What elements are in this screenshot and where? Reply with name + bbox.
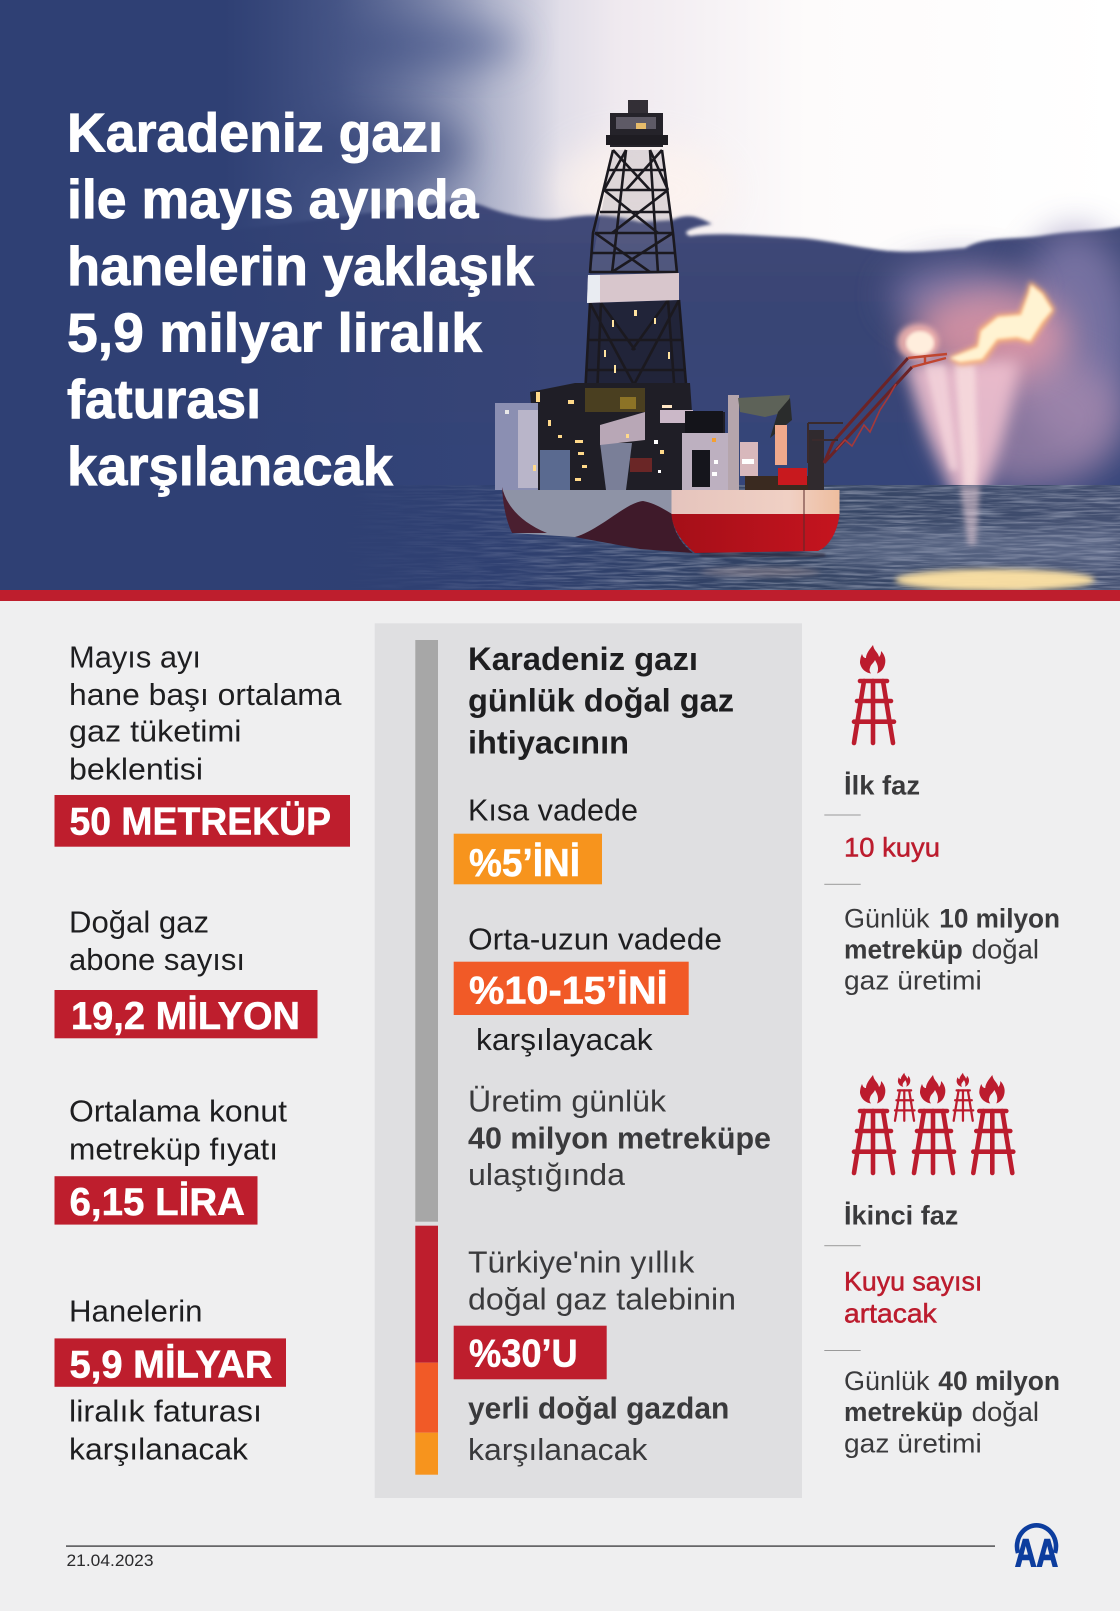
annual demand: Türkiye'nin yıllık (468, 1244, 695, 1279)
mid-long term: Orta-uzun vadede (468, 921, 722, 956)
flare glow and falling veil (897, 281, 1070, 530)
second phase text (824, 1201, 1060, 1458)
panel heading: günlük doğal gaz (468, 683, 734, 719)
panel heading: Karadeniz gazı (468, 641, 698, 677)
panel: center (375, 623, 802, 1498)
left stat: consumption: Mayıs ayı (69, 640, 201, 675)
left stat: consumption: gaz tüketimi (69, 714, 242, 749)
annual demand: yerli doğal gazdan (468, 1390, 729, 1425)
panel heading: ihtiyacının (468, 724, 629, 760)
first phase text: Günlük (844, 903, 930, 933)
first phase text: İlk faz (844, 770, 920, 800)
panel heading (468, 641, 734, 760)
hero photo: drillship at sea (0, 0, 1120, 591)
first phase text (824, 770, 1060, 996)
ship derrick tower (585, 100, 687, 396)
hero red band (0, 590, 1120, 601)
production note: ulaştığında (468, 1157, 626, 1192)
left stat: price: Ortalama konut (69, 1094, 287, 1129)
mid-long term: %10-15’İNİ (469, 969, 668, 1012)
second phase text: metreküp (844, 1397, 963, 1427)
left stat: consumption: hane başı ortalama (69, 677, 342, 712)
left stat: bill: Hanelerin (69, 1293, 202, 1328)
second phase text: doğal (972, 1397, 1039, 1427)
mid-long term (454, 921, 722, 1057)
production note: 40 milyon metreküpe (468, 1120, 771, 1155)
icon: single rig (854, 645, 894, 743)
short term: Kısa vadede (468, 793, 638, 828)
left stat: bill: liralık faturası (69, 1393, 262, 1428)
left stat: bill: 5,9 MİLYAR (70, 1343, 272, 1386)
left stat: subscribers: abone sayısı (69, 942, 245, 977)
title: faturası (67, 368, 261, 430)
left stat: subscribers: 19,2 MİLYON (71, 995, 300, 1038)
left stat: consumption (54, 640, 350, 847)
sea (238, 485, 1120, 590)
first phase text: 10 milyon (939, 903, 1060, 933)
annual demand: %30’U (469, 1333, 578, 1376)
title (67, 102, 534, 497)
second phase text: Günlük (844, 1366, 930, 1396)
short term: %5’İNİ (469, 842, 580, 885)
progress bar (415, 640, 438, 1475)
left stat: bill (54, 1293, 286, 1466)
first phase text: metreküp (844, 934, 963, 964)
annual demand (454, 1244, 736, 1467)
left stat: consumption: 50 METREKÜP (70, 800, 331, 843)
title: ile mayıs ayında (67, 168, 479, 230)
first phase text: doğal (972, 934, 1039, 964)
title: hanelerin yaklaşık (67, 235, 534, 297)
icon: multiple rigs (854, 1073, 1013, 1173)
left stat: consumption: beklentisi (69, 751, 203, 786)
ship flare boom (808, 354, 947, 463)
second phase text: İkinci faz (844, 1201, 958, 1231)
short term (454, 793, 638, 885)
left stat: subscribers: Doğal gaz (69, 905, 209, 940)
logo: AA (1015, 1525, 1058, 1576)
second phase text: Kuyu sayısı (844, 1266, 982, 1296)
ship superstructure (495, 383, 824, 490)
date: 21.04.2023 (66, 1551, 154, 1570)
left stat: price: metreküp fıyatı (69, 1132, 278, 1167)
second phase text: artacak (844, 1299, 937, 1329)
title: 5,9 milyar liralık (67, 302, 482, 364)
title: Karadeniz gazı (67, 102, 443, 164)
second phase text: 40 milyon (938, 1366, 1060, 1396)
mid-long term: karşılayacak (476, 1022, 653, 1057)
left stat: price (54, 1094, 287, 1225)
annual demand: karşılanacak (468, 1432, 648, 1467)
second phase text: gaz üretimi (844, 1428, 982, 1458)
first phase text: 10 kuyu (844, 833, 940, 863)
left stat: subscribers (54, 905, 318, 1038)
footer rule (66, 1545, 995, 1547)
production note: Üretim günlük (468, 1084, 667, 1119)
left stat: price: 6,15 LİRA (70, 1181, 245, 1224)
annual demand: doğal gaz talebinin (468, 1281, 736, 1316)
logo: AA: AA (1015, 1532, 1058, 1576)
left stat: bill: karşılanacak (69, 1431, 249, 1466)
production note (468, 1084, 771, 1192)
first phase text: gaz üretimi (844, 966, 982, 996)
title: karşılanacak (67, 435, 393, 497)
ship hull (502, 487, 840, 557)
